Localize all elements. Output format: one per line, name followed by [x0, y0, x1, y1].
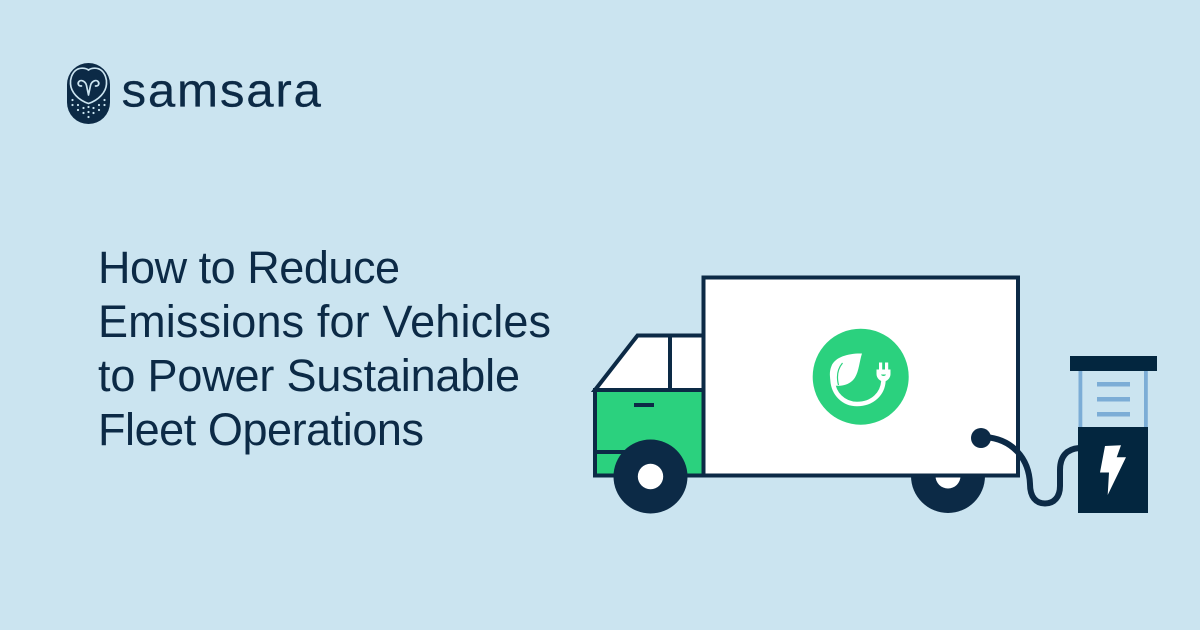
plug [876, 362, 890, 382]
icon: leaf and plug badge [813, 329, 909, 425]
truck cab door [595, 390, 704, 476]
title: Emissions for Vehicles [98, 296, 551, 347]
truck cab window [595, 336, 704, 390]
title [98, 242, 551, 455]
charger top bar [1070, 356, 1157, 371]
cord [832, 378, 884, 404]
charger base [1078, 427, 1148, 513]
truck rear wheel [911, 439, 985, 513]
charging station [1070, 356, 1157, 513]
charging cable [985, 437, 1079, 504]
title: How to Reduce [98, 242, 400, 293]
icon: owl badge [67, 63, 110, 124]
icon: lightning bolt [1100, 445, 1126, 495]
title: Fleet Operations [98, 404, 424, 455]
cable connector [971, 428, 991, 448]
title: to Power Sustainable [98, 350, 520, 401]
truck cargo box [704, 278, 1018, 476]
samsara logo [67, 63, 321, 124]
logo wordmark: samsara [122, 65, 321, 117]
leaf [830, 353, 862, 386]
charger display [1078, 370, 1148, 428]
truck front wheel [614, 440, 688, 514]
illustration: electric truck [595, 278, 1157, 514]
